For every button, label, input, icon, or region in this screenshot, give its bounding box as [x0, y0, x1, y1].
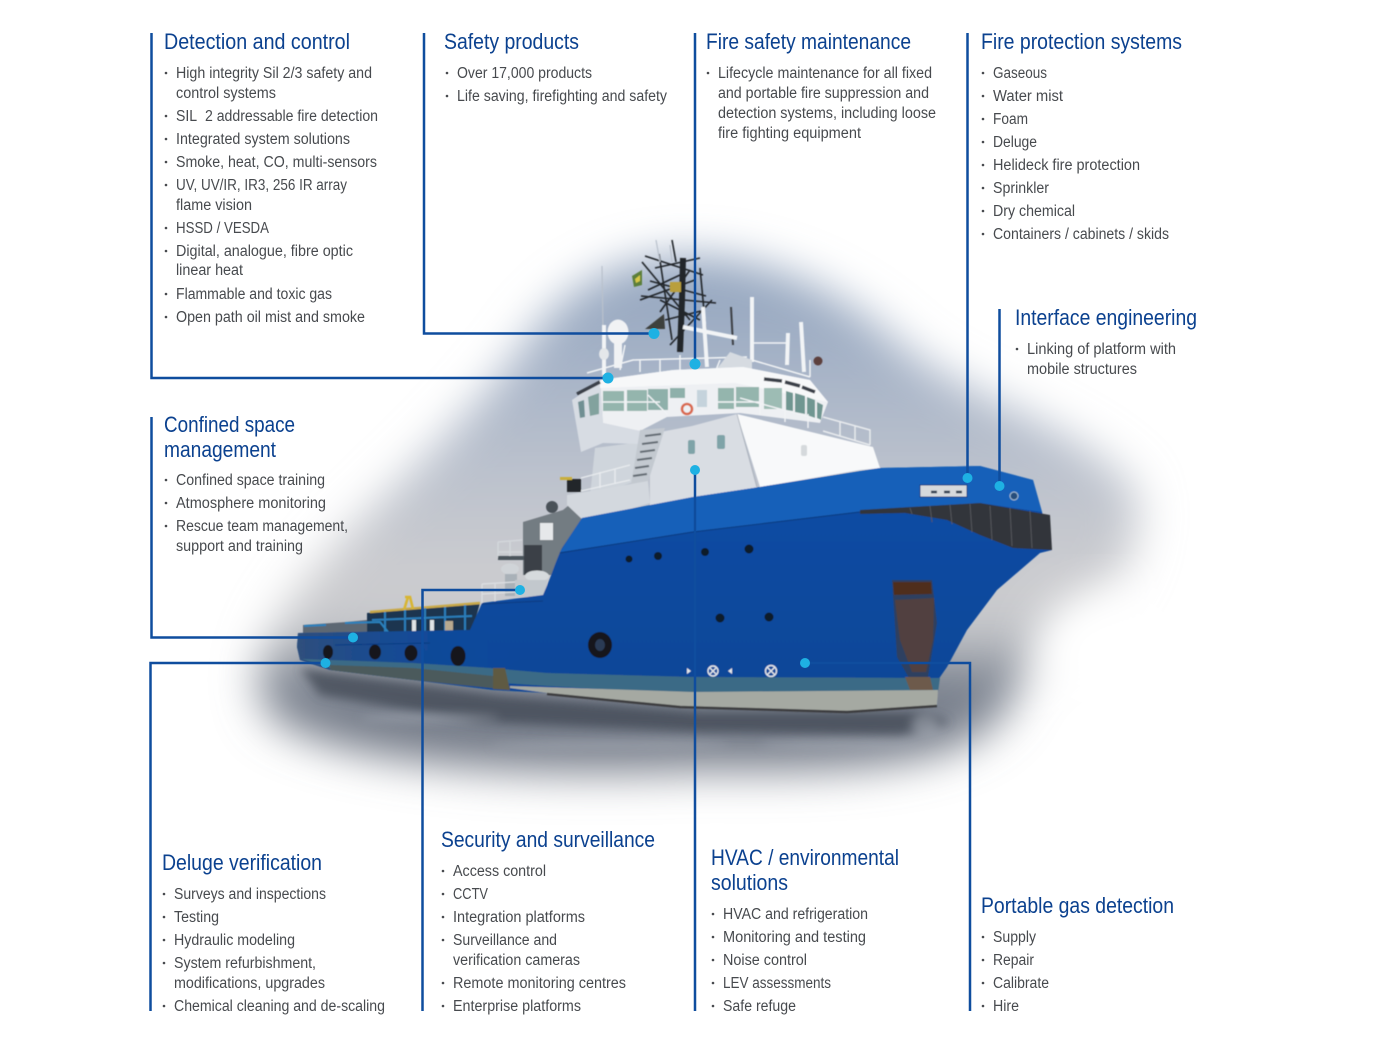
- list: [707, 65, 936, 142]
- list: Hire: [993, 998, 1019, 1015]
- list: Open path oil mist and smoke: [176, 309, 365, 326]
- leader line: security and surveillance: [422, 585, 525, 1011]
- list: Lifecycle maintenance for all fixed: [718, 65, 932, 82]
- list: [1016, 341, 1176, 378]
- list: System refurbishment,: [174, 955, 316, 972]
- list: Integration platforms: [453, 909, 585, 926]
- hull: [297, 466, 1052, 712]
- list: High integrity Sil 2/3 safety and: [176, 65, 372, 82]
- water ripples: [360, 713, 939, 749]
- rails and poles on the top deck: [587, 297, 810, 377]
- list: Dry chemical: [993, 203, 1075, 220]
- list: modifications, upgrades: [174, 975, 325, 992]
- heading: Confined space: [164, 412, 295, 437]
- list: Deluge: [993, 134, 1037, 151]
- list: Surveillance and: [453, 932, 557, 949]
- illustration: offshore support vessel: [297, 240, 1052, 712]
- list: Linking of platform with: [1027, 341, 1176, 358]
- leader line: detection and control: [152, 33, 614, 384]
- list: [165, 65, 378, 326]
- water reflection under the hull: [300, 668, 950, 735]
- heading: Interface engineering: [1015, 305, 1197, 330]
- list: and portable fire suppression and: [718, 85, 929, 102]
- panel: deluge verification: [162, 850, 385, 1015]
- list: Confined space training: [176, 472, 325, 489]
- bridge house: [572, 367, 828, 452]
- cargo rail at the stern: [303, 597, 480, 634]
- list: Supply: [993, 929, 1036, 946]
- leader line: fire safety maintenance: [690, 33, 700, 370]
- heading: Fire safety maintenance: [706, 29, 911, 54]
- heading: [164, 412, 295, 462]
- list: Sprinkler: [993, 180, 1049, 197]
- panel: detection and control: [164, 29, 378, 326]
- mast and lattice: [602, 240, 733, 352]
- list: control systems: [176, 85, 276, 102]
- list: Chemical cleaning and de-scaling: [174, 998, 385, 1015]
- rust patch: [892, 580, 937, 685]
- heading: [711, 845, 899, 895]
- list: mobile structures: [1027, 361, 1137, 378]
- heading: Fire protection systems: [981, 29, 1182, 54]
- list: [446, 65, 667, 105]
- upper platform: [716, 352, 752, 370]
- list: Noise control: [723, 952, 807, 969]
- leader line: HVAC: [690, 465, 700, 1011]
- list: detection systems, including loose: [718, 105, 936, 122]
- panel: fire protection systems: [981, 29, 1182, 243]
- draft marks: [708, 666, 776, 676]
- list: CCTV: [453, 886, 489, 903]
- accommodation tower: [590, 414, 880, 505]
- list: Digital, analogue, fibre optic: [176, 243, 353, 260]
- list: linear heat: [176, 262, 244, 279]
- panel: interface engineering: [1015, 305, 1197, 378]
- list: Water mist: [993, 88, 1064, 105]
- list: SIL 2 addressable fire detection: [176, 108, 378, 125]
- list: Over 17,000 products: [457, 65, 592, 82]
- list: HVAC and refrigeration: [723, 906, 868, 923]
- heading: Detection and control: [164, 29, 350, 54]
- heading: Portable gas detection: [981, 893, 1174, 918]
- panel: HVAC / environmental solutions: [711, 845, 899, 1015]
- list: Helideck fire protection: [993, 157, 1140, 174]
- list: Flammable and toxic gas: [176, 286, 332, 303]
- tyre fenders: [323, 632, 612, 666]
- heading: Security and surveillance: [441, 827, 655, 852]
- list: [442, 863, 626, 1015]
- leader line: confined space management: [152, 417, 358, 642]
- list: Containers / cabinets / skids: [993, 226, 1169, 243]
- list: Smoke, heat, CO, multi-sensors: [176, 154, 377, 171]
- panel: security and surveillance: [441, 827, 655, 1015]
- list: Remote monitoring centres: [453, 975, 626, 992]
- list: UV, UV/IR, IR3, 256 IR array: [176, 177, 347, 194]
- list: [982, 65, 1169, 243]
- bow fittings: [920, 485, 967, 497]
- panel: confined space management: [164, 412, 348, 555]
- leader line: fire protection systems: [962, 33, 972, 483]
- leader line: safety products: [424, 33, 660, 339]
- list: HSSD / VESDA: [176, 220, 270, 237]
- leader line: interface engineering: [994, 309, 1004, 491]
- boot topping: [302, 659, 940, 694]
- list: Testing: [174, 909, 219, 926]
- list: support and training: [176, 538, 303, 555]
- list: Monitoring and testing: [723, 929, 866, 946]
- leader line: portable gas detection: [800, 658, 970, 1011]
- background: vignette of sky and water behind the ship: [259, 256, 1185, 773]
- list: Surveys and inspections: [174, 886, 326, 903]
- external stair: [631, 428, 665, 484]
- heading: solutions: [711, 870, 788, 895]
- list: Life saving, firefighting and safety: [457, 88, 667, 105]
- list: fire fighting equipment: [718, 125, 862, 142]
- list: [163, 886, 385, 1015]
- radome: [599, 320, 628, 368]
- list: Rescue team management,: [176, 518, 348, 535]
- list: [982, 929, 1049, 1015]
- flag and mast plates: [632, 270, 822, 366]
- panel: portable gas detection: [981, 893, 1174, 1015]
- heading: HVAC / environmental: [711, 845, 899, 870]
- list: [165, 472, 348, 555]
- lower platform with rail and box: [560, 465, 650, 522]
- list: Atmosphere monitoring: [176, 495, 326, 512]
- heading: Safety products: [444, 29, 579, 54]
- bow fender: [860, 503, 1052, 550]
- lower rear deck: crane, lifeboats, rails: [482, 492, 590, 604]
- list: LEV assessments: [723, 975, 831, 992]
- list: Calibrate: [993, 975, 1049, 992]
- list: Repair: [993, 952, 1034, 969]
- heading: Deluge verification: [162, 850, 322, 875]
- leader line: deluge verification: [150, 658, 330, 1011]
- heading: management: [164, 437, 276, 462]
- list: verification cameras: [453, 952, 580, 969]
- list: Gaseous: [993, 65, 1047, 82]
- portholes: [626, 544, 774, 622]
- panel: fire safety maintenance: [706, 29, 936, 142]
- panel: safety products: [444, 29, 667, 105]
- list: Safe refuge: [723, 998, 796, 1015]
- list: Foam: [993, 111, 1028, 128]
- list: Enterprise platforms: [453, 998, 581, 1015]
- list: Integrated system solutions: [176, 131, 350, 148]
- list: Access control: [453, 863, 546, 880]
- list: Hydraulic modeling: [174, 932, 295, 949]
- list: flame vision: [176, 197, 252, 214]
- list: [712, 906, 868, 1015]
